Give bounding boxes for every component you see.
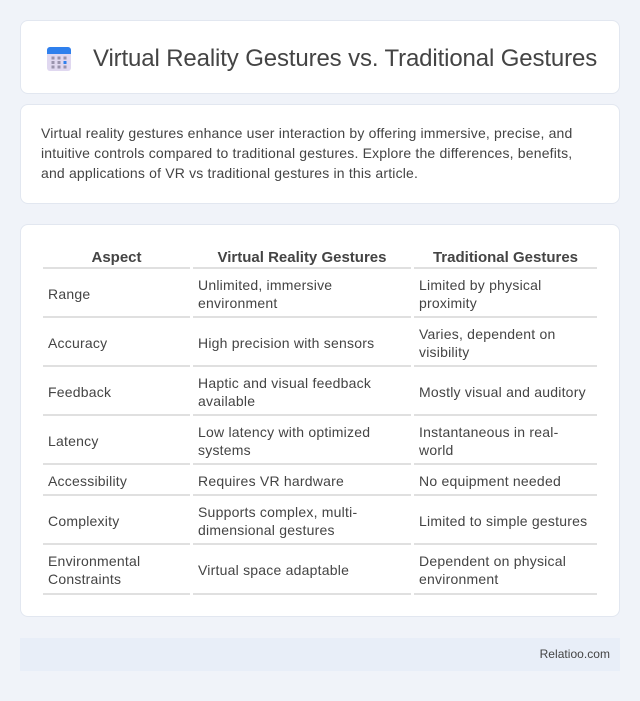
row: environmental constraints — [48, 553, 140, 587]
intro paragraph: Virtual reality gestures enhance user interaction by offering immersive, precise, and — [41, 125, 572, 141]
table header: aspect: Aspect — [91, 249, 142, 266]
comparison table: Haptic and visual feedback — [198, 375, 371, 391]
comparison table: Instantaneous in real- — [419, 424, 558, 440]
row: environmental constraints: Constraints — [48, 571, 121, 587]
row: feedback: Feedback — [48, 384, 111, 400]
row: latency: Latency — [48, 433, 99, 449]
row: range: Range — [48, 286, 90, 302]
header panel — [20, 20, 620, 94]
intro text panel — [20, 104, 620, 204]
comparison table: Limited by physical — [419, 277, 541, 293]
comparison table: available — [198, 393, 255, 409]
title: Virtual Reality Gestures vs. Traditional Gestures — [93, 45, 597, 72]
comparison table: Requires VR hardware — [198, 473, 344, 489]
row: environmental constraints: Environmental — [48, 553, 140, 569]
comparison table: dimensional gestures — [198, 522, 335, 538]
comparison table: Unlimited, immersive — [198, 277, 332, 293]
comparison table: Supports complex, multi- — [198, 504, 357, 520]
comparison table: world — [419, 442, 454, 458]
footer bar — [20, 638, 620, 671]
row: accuracy: Accuracy — [48, 335, 107, 351]
comparison table: Limited to simple gestures — [419, 513, 587, 529]
comparison table: visibility — [419, 344, 469, 360]
comparison table: systems — [198, 442, 251, 458]
intro paragraph: and applications of VR vs traditional gestures in this article. — [41, 165, 418, 181]
comparison table: No equipment needed — [419, 473, 561, 489]
comparison table: environment — [198, 295, 277, 311]
row: accessibility: Accessibility — [48, 473, 127, 489]
comparison table: Mostly visual and auditory — [419, 384, 586, 400]
comparison table: proximity — [419, 295, 477, 311]
comparison table panel — [20, 224, 620, 617]
icon: calendar — [47, 47, 71, 71]
intro paragraph: intuitive controls compared to traditional gestures. Explore the differences, benefits, — [41, 145, 572, 161]
table header: traditional gestures: Traditional Gestures — [433, 249, 578, 266]
intro paragraph — [41, 125, 572, 181]
footer text: Relatioo.com — [540, 647, 610, 661]
table header: virtual reality gestures: Virtual Reality Gestures — [218, 249, 386, 266]
comparison table: environment — [419, 571, 498, 587]
comparison table: Low latency with optimized — [198, 424, 370, 440]
comparison table: High precision with sensors — [198, 335, 374, 351]
comparison table: Varies, dependent on — [419, 326, 555, 342]
row: complexity: Complexity — [48, 513, 119, 529]
comparison table: Virtual space adaptable — [198, 562, 349, 578]
comparison table: Dependent on physical — [419, 553, 566, 569]
